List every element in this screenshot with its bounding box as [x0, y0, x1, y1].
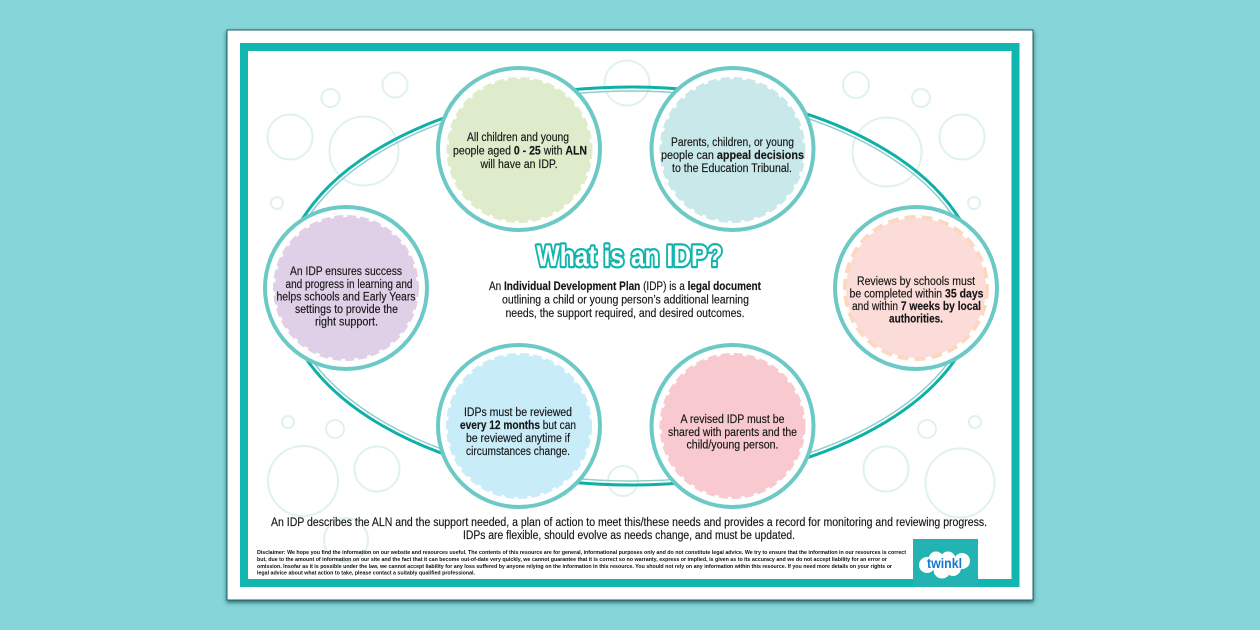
disclaimer: but, due to the amount of information on our site and the fact that it can become out-of-date very quickly, we cannot guarantee that it is correct so no warranty, express or implied, is given as to its accuracy and we do not accept liability for an error or	[257, 557, 887, 563]
circle: revised IDP: shared with parents and the	[668, 427, 797, 439]
circle: review deadlines: and within 7 weeks by local	[852, 301, 981, 313]
circle: who has an IDP: will have an IDP.	[480, 159, 558, 171]
circle: success and progress: An IDP ensures success	[290, 266, 402, 278]
disclaimer: omission. Insofar as it is possible under the law, we cannot accept liability for any loss suffered by anyone relying on the information in this resource. You should not rely on any information within this resource. If you need more details on your rights or	[257, 564, 892, 570]
decorative bubbles	[268, 60, 994, 562]
circle: appeals: people can appeal decisions	[661, 150, 804, 162]
circle: success and progress: and progress in learning and	[286, 279, 412, 291]
circle: review frequency: circumstances change.	[466, 446, 570, 458]
circle: review deadlines: Reviews by schools must	[857, 276, 976, 288]
disclaimer	[257, 550, 906, 576]
intro text: needs, the support required, and desired outcomes.	[506, 308, 744, 320]
circle: revised IDP: child/young person.	[686, 440, 778, 452]
circle: appeals: to the Education Tribunal.	[672, 163, 792, 175]
summary text	[271, 517, 987, 542]
twinkl logo: twinkl	[927, 555, 962, 571]
circle: who has an IDP: All children and young	[467, 132, 569, 144]
title: What is an IDP?	[536, 240, 722, 273]
circle: revised IDP: A revised IDP must be	[680, 414, 784, 426]
circle: review deadlines	[835, 207, 997, 369]
circle: success and progress: right support.	[315, 316, 378, 328]
summary text: IDPs are flexible, should evolve as needs change, and must be updated.	[463, 530, 795, 542]
circle: revised IDP	[652, 345, 814, 507]
circle: appeals	[652, 68, 814, 230]
intro text: outlining a child or young person’s additional learning	[502, 294, 749, 306]
circle: success and progress: settings to provide the	[295, 304, 398, 316]
circle: review deadlines: authorities.	[889, 314, 943, 326]
circle: who has an IDP: people aged 0 - 25 with ALN	[453, 146, 587, 158]
intro text	[489, 281, 761, 320]
circle: who has an IDP	[438, 68, 600, 230]
teal frame	[244, 47, 1016, 583]
circle: review frequency: IDPs must be reviewed	[464, 407, 572, 419]
disclaimer: Disclaimer: We hope you find the information on our website and resources useful. The contents of this resource are for general, informational purposes only and do not constitute legal advice. We try to ensure that the information in our resources is correct	[257, 550, 906, 556]
circle: success and progress	[265, 207, 427, 369]
twinkl logo	[913, 539, 978, 587]
circle: review deadlines: be completed within 35 days	[850, 288, 984, 300]
white poster card	[227, 30, 1033, 600]
connecting double ellipse	[282, 87, 980, 485]
circle: review frequency: every 12 months but can	[460, 420, 576, 432]
circle: review frequency	[438, 345, 600, 507]
circle: success and progress: helps schools and Early Years	[276, 292, 416, 304]
circle: appeals: Parents, children, or young	[671, 137, 794, 149]
summary text: An IDP describes the ALN and the support needed, a plan of action to meet this/these needs and provides a record for monitoring and reviewing progress.	[271, 517, 987, 529]
circle: review frequency: be reviewed anytime if	[466, 433, 571, 445]
intro text: An Individual Development Plan (IDP) is a legal document	[489, 281, 761, 293]
disclaimer: legal advice about what action to take, please contact a suitably qualified professional.	[257, 570, 476, 576]
